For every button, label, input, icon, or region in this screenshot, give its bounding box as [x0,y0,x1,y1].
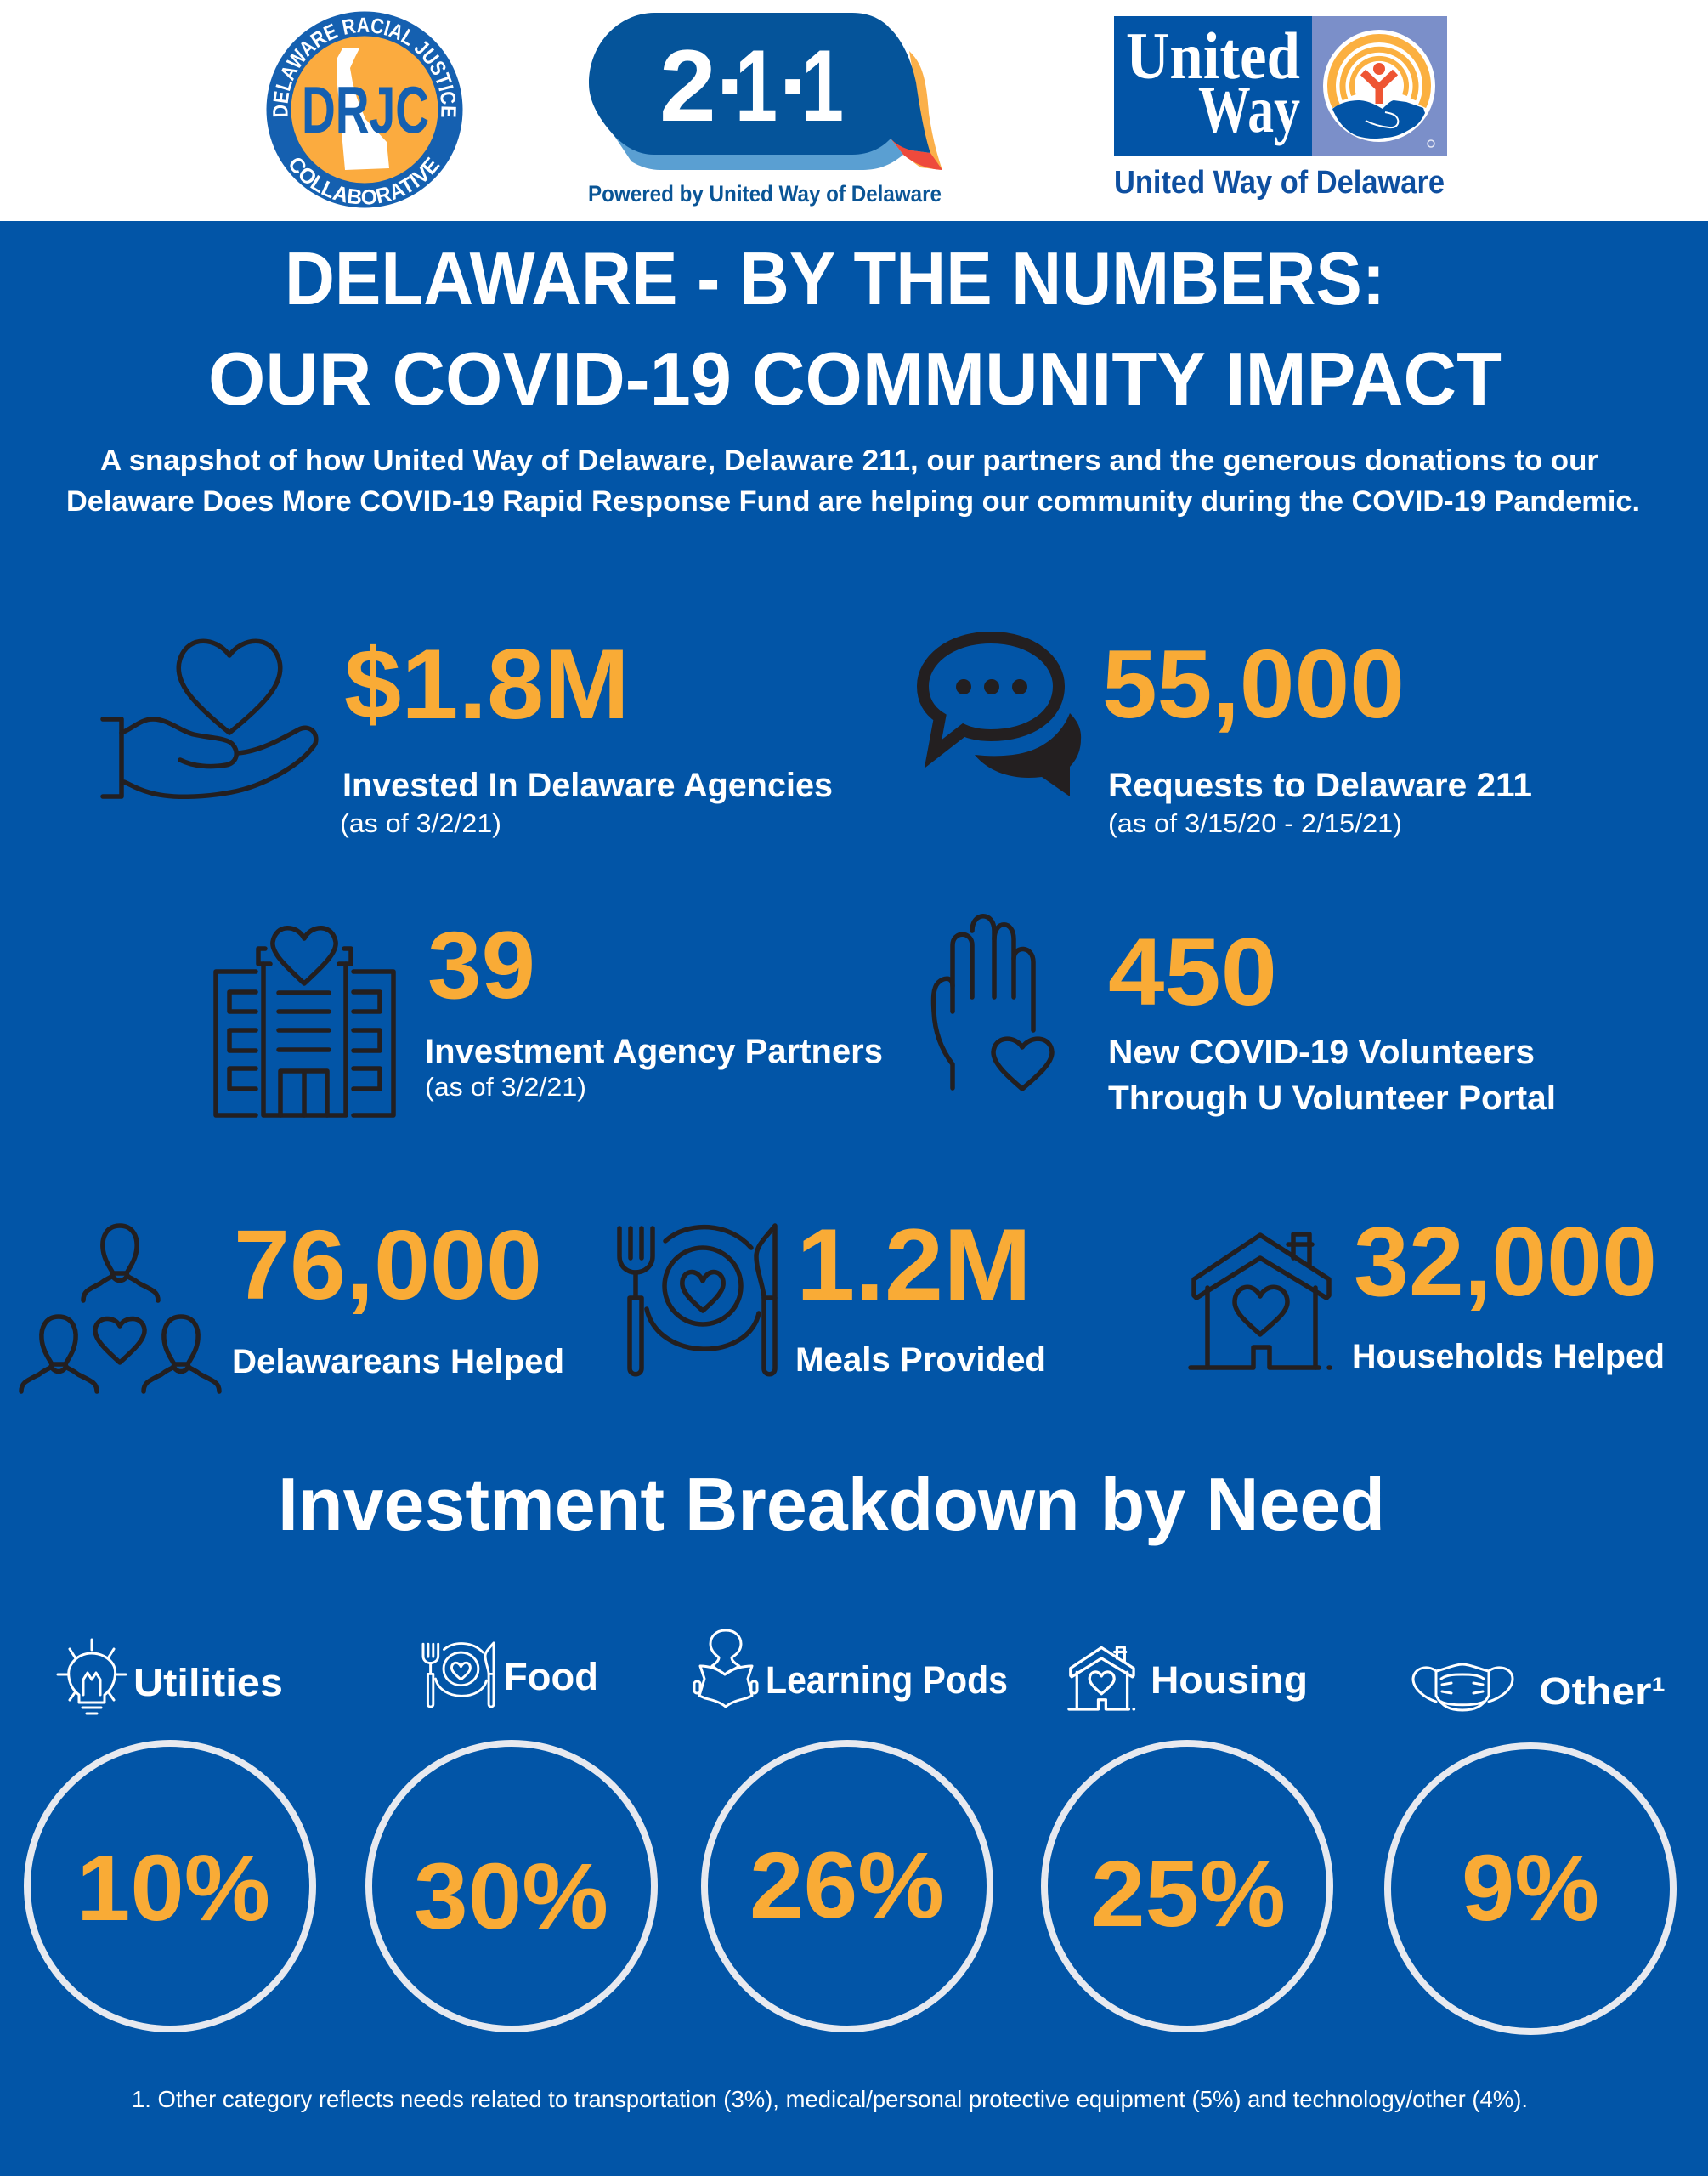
logo: Delaware Racial Justice Collaborative: DRJC [302,72,429,147]
circle: other 9% [1388,1746,1673,2032]
stat: 450 volunteers: 450 [1108,919,1277,1025]
heading: investment breakdown: Investment Breakdown by Need [278,1462,1385,1546]
title: DELAWARE - BY THE NUMBERS: [285,236,1385,320]
logo: United Way of Delaware: United [1126,19,1300,93]
icon: plate and cutlery with heart [619,1226,775,1374]
stat: 1.2M meals: 1.2M [796,1208,1032,1322]
icon: building with heart [216,928,393,1115]
stat: 450 volunteers: Through U Volunteer Portal [1108,1080,1556,1117]
icon: raised hand with heart [934,916,1052,1089]
circle: utilities 10% [27,1743,313,2029]
title: OUR COVID-19 COMMUNITY IMPACT [208,337,1502,421]
circle: learning pods 26%: 26% [749,1833,944,1938]
white header band [0,0,1708,221]
stat: 1.2M meals [795,1208,1046,1379]
circle: other 9%: 9% [1462,1836,1599,1941]
circle: utilities 10%: 10% [76,1836,270,1941]
stat: 76,000 Delawareans: Delawareans Helped [232,1343,564,1380]
category: utilities: Utilities [133,1661,283,1704]
stat: $1.8M invested: (as of 3/2/21) [340,808,501,838]
logo: United Way of Delaware: Way [1198,72,1300,146]
category: food [423,1643,598,1707]
logo: 2-1-1 speech bubble: 2 [659,29,716,143]
stat: 76,000 Delawareans: 76,000 [234,1210,542,1320]
icon: speech bubbles [923,638,1081,796]
category: learning pods: Learning Pods [766,1658,1008,1702]
circle: housing 25% [1044,1743,1330,2029]
category: utilities [58,1640,283,1714]
circle: learning pods 26% [704,1743,990,2029]
category: other: Other¹ [1539,1669,1666,1713]
circle: food 30% [369,1743,654,2029]
stat: 39 partners: 39 [427,912,535,1018]
logo: Delaware Racial Justice Collaborative: DELAWARE RACIAL JUSTICE [273,17,456,117]
stat: 55,000 requests: (as of 3/15/20 - 2/15/21) [1108,808,1402,838]
stat: 1.2M meals: Meals Provided [795,1341,1046,1379]
intro text: Delaware Does More COVID-19 Rapid Response Fund are helping our community during the COVID-19 Pandemic. [66,485,1640,518]
icon: house with heart [1191,1234,1330,1368]
logo: 2-1-1 speech bubble: 1 [801,29,844,143]
circle: housing 25%: 25% [1091,1842,1286,1946]
logo: 2-1-1 speech bubble: 1 [735,29,778,143]
logo: United Way of Delaware [1114,16,1447,201]
logo: 2-1-1 speech bubble [588,13,942,207]
category: housing [1069,1647,1308,1709]
stat: 39 partners: Investment Agency Partners [425,1033,883,1070]
stat: 55,000 requests: Requests to Delaware 211 [1108,767,1532,804]
category: housing: Housing [1151,1658,1308,1702]
category: learning pods [694,1630,1008,1707]
category: food: Food [504,1655,598,1698]
stat: 450 volunteers [1108,919,1556,1117]
stat: 55,000 requests [1102,631,1532,838]
footnote: 1. Other category reflects needs related to transportation (3%), medical/personal protective equipment (5%) and technology/other (4%). [132,2086,1528,2112]
stat: 76,000 Delawareans [232,1210,564,1380]
stat: 450 volunteers: New COVID-19 Volunteers [1108,1034,1535,1071]
stat: 55,000 requests: 55,000 [1102,631,1405,739]
stat: 39 partners: (as of 3/2/21) [425,1072,586,1102]
stat: 32,000 households: 32,000 [1354,1206,1657,1317]
intro text: A snapshot of how United Way of Delaware, Delaware 211, our partners and the generous donations to our [100,445,1598,477]
stat: 32,000 households: Households Helped [1352,1338,1665,1375]
logo: Delaware Racial Justice Collaborative [267,12,462,207]
logo: Delaware Racial Justice Collaborative: COLLABORATIVE [290,156,440,205]
stat: $1.8M invested [340,628,833,838]
icon: three people with heart [21,1226,219,1391]
circle: food 30%: 30% [414,1844,608,1949]
logo: United Way of Delaware: United Way of Delaware [1114,165,1445,201]
stat: $1.8M invested: Invested In Delaware Agencies [342,767,833,804]
intro text [66,445,1640,518]
logo: 2-1-1 speech bubble: · [778,29,812,143]
logo: 2-1-1 speech bubble: Powered by United Way of Delaware [588,181,942,207]
title [208,236,1502,421]
stat: 32,000 households [1352,1206,1665,1375]
icon: hand holding heart [103,641,316,796]
category: other [1413,1664,1666,1713]
stat: $1.8M invested: $1.8M [344,628,630,740]
logo: 2-1-1 speech bubble: · [715,29,749,143]
stat: 39 partners [425,912,883,1102]
